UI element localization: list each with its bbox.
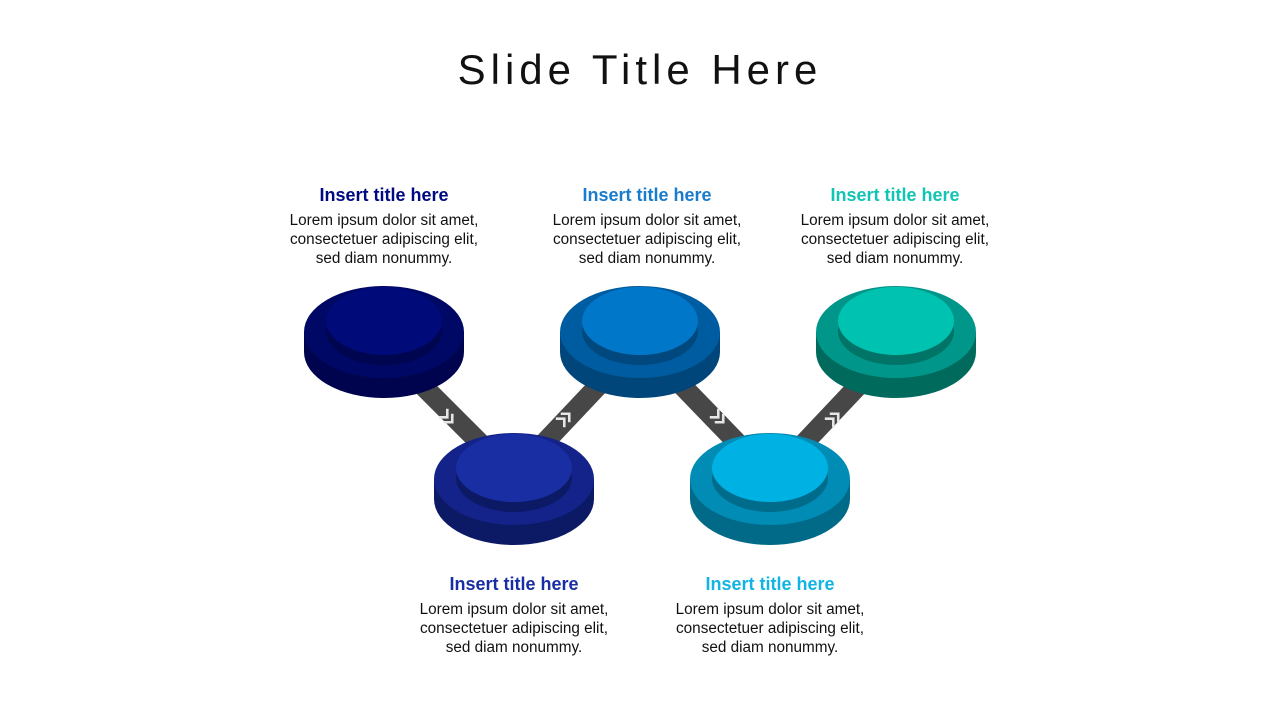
- text block 3: Insert title here: [582, 185, 712, 205]
- text block 4: [676, 574, 864, 656]
- text block 3: Lorem ipsum dolor sit amet,: [553, 212, 741, 229]
- connector 1: [405, 368, 495, 458]
- text block 4: Insert title here: [705, 574, 835, 594]
- disc 5: [816, 286, 976, 398]
- disc 2: [434, 433, 594, 545]
- text block 1: Lorem ipsum dolor sit amet,: [290, 212, 478, 229]
- text block 5: sed diam nonummy.: [827, 250, 963, 267]
- text block 5: consectetuer adipiscing elit,: [801, 231, 989, 248]
- text block 2: Insert title here: [449, 574, 579, 594]
- disc 1: [304, 286, 464, 398]
- text block 3: consectetuer adipiscing elit,: [553, 231, 741, 248]
- text block 4: sed diam nonummy.: [702, 639, 838, 656]
- text block 4: Lorem ipsum dolor sit amet,: [676, 601, 864, 618]
- text block 1: Insert title here: [319, 185, 449, 205]
- text block 1: [290, 185, 478, 267]
- text block 3: [553, 185, 741, 267]
- text block 2: consectetuer adipiscing elit,: [420, 620, 608, 637]
- disc 4: [690, 433, 850, 545]
- text block 2: sed diam nonummy.: [446, 639, 582, 656]
- text block 1: sed diam nonummy.: [316, 250, 452, 267]
- text block 5: Lorem ipsum dolor sit amet,: [801, 212, 989, 229]
- text block 5: Insert title here: [830, 185, 960, 205]
- connector 2: [530, 368, 615, 458]
- text block 4: consectetuer adipiscing elit,: [676, 620, 864, 637]
- text block 1: consectetuer adipiscing elit,: [290, 231, 478, 248]
- title: Slide Title Here: [458, 46, 822, 93]
- disc 3: [560, 286, 720, 398]
- text block 5: [801, 185, 989, 267]
- text block 2: Lorem ipsum dolor sit amet,: [420, 601, 608, 618]
- text block 3: sed diam nonummy.: [579, 250, 715, 267]
- text block 2: [420, 574, 608, 656]
- connector 3: [665, 368, 752, 458]
- connector 4: [790, 368, 875, 458]
